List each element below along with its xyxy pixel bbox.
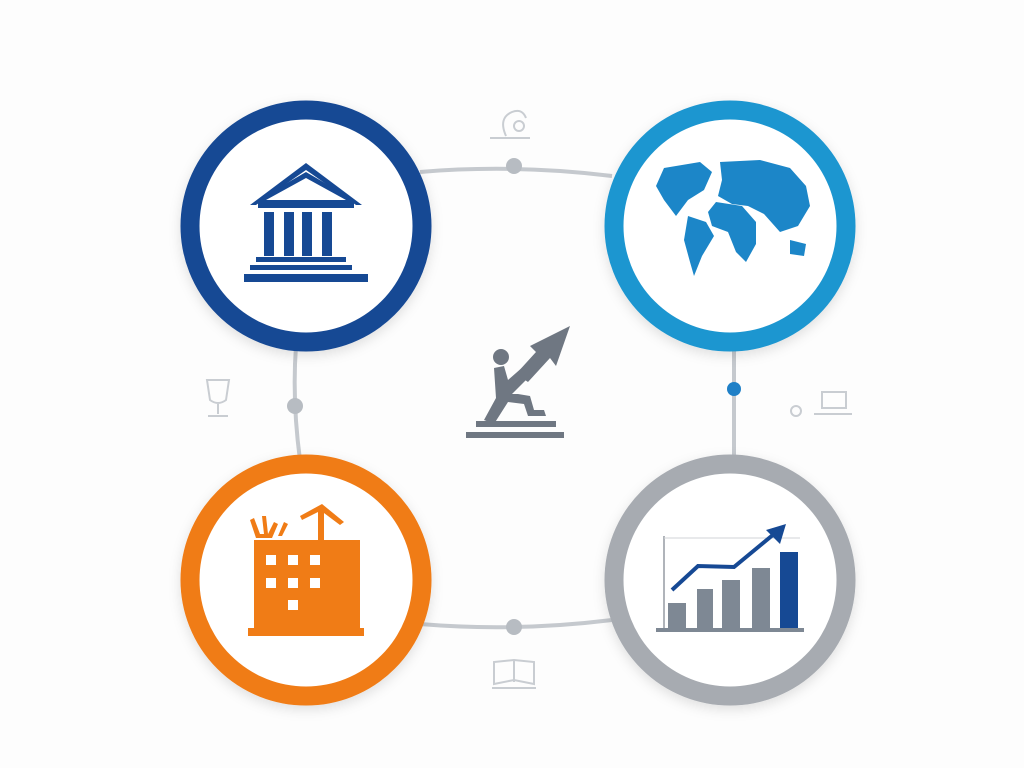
small icon: headset/user (490, 111, 530, 138)
circle: globe (614, 110, 846, 342)
circle: construction (190, 464, 422, 696)
small icon: glass (207, 380, 229, 416)
icon: building under construction (248, 504, 364, 636)
circle: government building (190, 110, 422, 342)
connector dots (287, 158, 741, 635)
circle: growth chart (614, 464, 846, 696)
small icon: book (492, 660, 536, 688)
connectors (295, 169, 734, 627)
icon: bar chart with arrow (656, 524, 804, 632)
center icon: person pushing arrow (466, 326, 570, 438)
small icon: laptop (791, 392, 852, 416)
icon: world map (656, 160, 810, 276)
icon: classical building (244, 163, 368, 282)
